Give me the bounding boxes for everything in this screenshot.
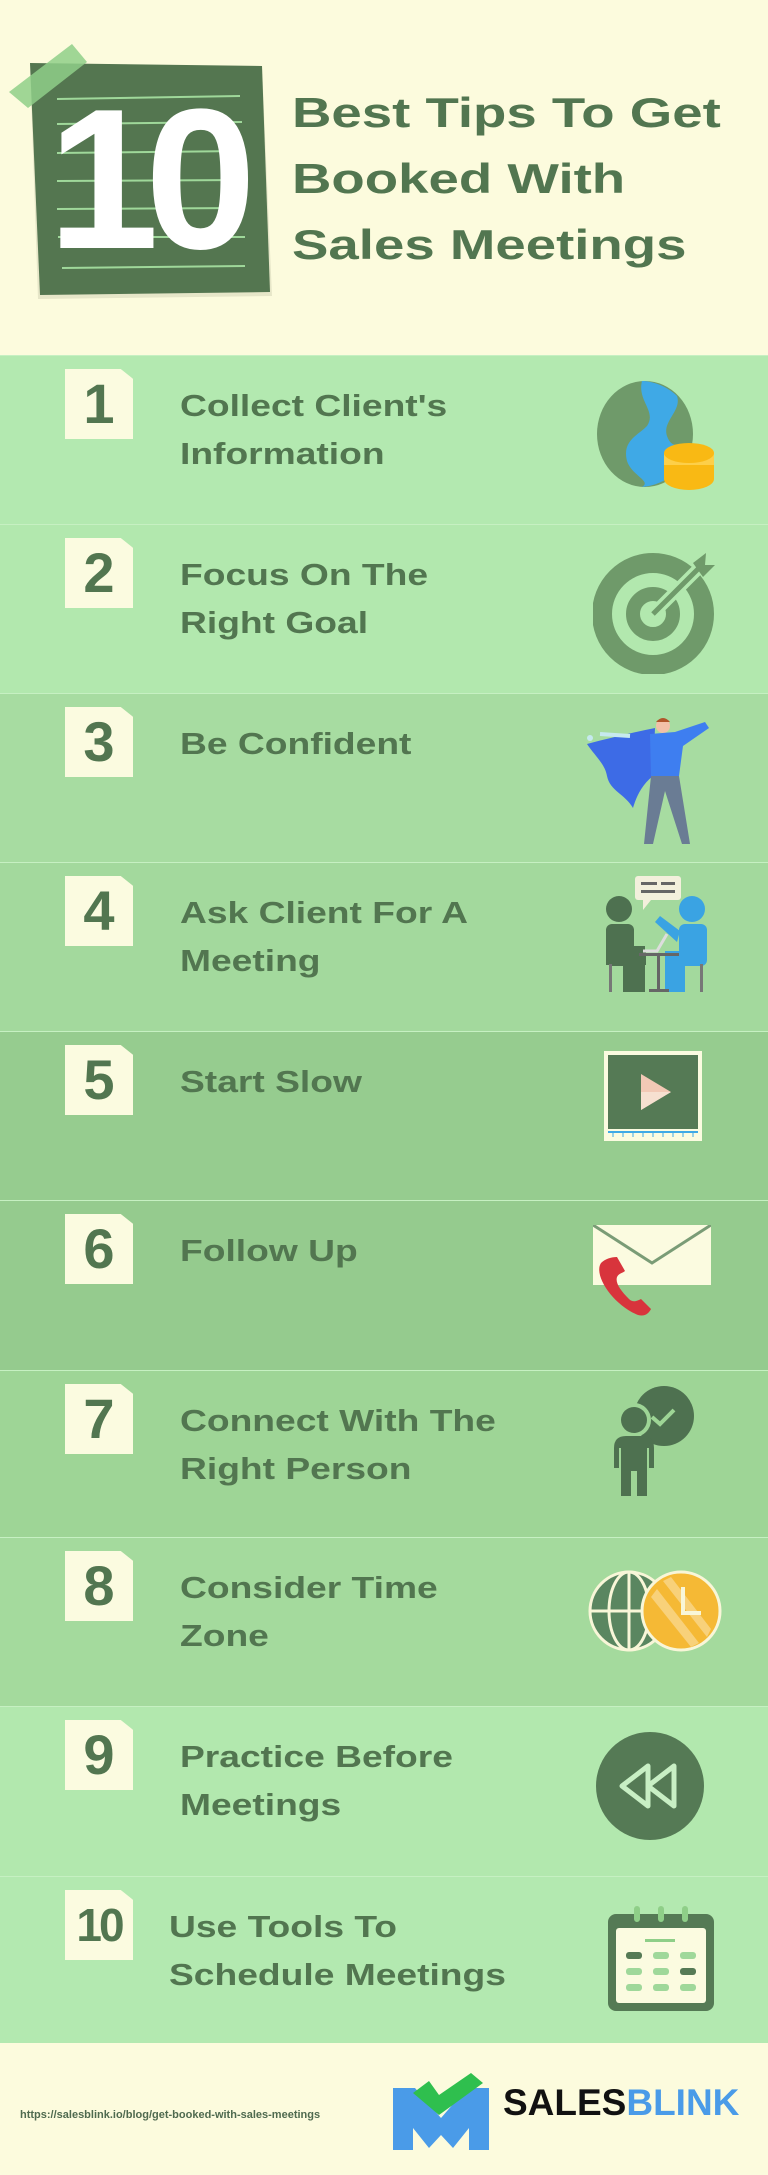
- text 8: [180, 1570, 438, 1653]
- number 6: [65, 1214, 133, 1284]
- icon: envelope phone: [593, 1225, 711, 1316]
- icon: calendar: [608, 1906, 714, 2011]
- number 6: 6: [83, 1217, 115, 1280]
- title: Booked With: [292, 155, 625, 202]
- number 7: [65, 1384, 133, 1454]
- text 1: Collect Client's: [180, 388, 447, 423]
- text 6: Follow Up: [180, 1233, 358, 1268]
- number 1: 1: [83, 372, 115, 435]
- url text: https://salesblink.io/blog/get-booked-with-sales-meetings: [20, 2109, 320, 2121]
- icon: person with check: [614, 1386, 694, 1496]
- text 10: Use Tools To: [169, 1909, 397, 1944]
- number 9: [65, 1720, 133, 1790]
- number 8: 8: [83, 1554, 115, 1617]
- number 8: [65, 1551, 133, 1621]
- text 8: Consider Time: [180, 1570, 438, 1605]
- text 5: Start Slow: [180, 1064, 362, 1099]
- text 4: Meeting: [180, 943, 321, 978]
- logo text: SALESBLINK: [503, 2082, 739, 2123]
- number 5: [65, 1045, 133, 1115]
- row 5: [0, 1031, 768, 1200]
- text 10: [169, 1909, 506, 1992]
- icon: superhero: [587, 718, 709, 844]
- number 1: [65, 369, 133, 439]
- row 3: [0, 693, 768, 862]
- logo icon: [393, 2073, 489, 2150]
- text 9: Meetings: [180, 1787, 341, 1822]
- number 3: 3: [83, 710, 115, 773]
- notepad with big 10: 10: [48, 68, 249, 291]
- row 8: [0, 1537, 768, 1706]
- number 10: [65, 1890, 133, 1960]
- text 7: [180, 1403, 496, 1486]
- text 1: [180, 388, 447, 471]
- text 2: Focus On The: [180, 557, 428, 592]
- number 2: [65, 538, 133, 608]
- header: [9, 44, 721, 299]
- icon: video play: [604, 1051, 702, 1141]
- icon: globe and clock: [588, 1570, 722, 1652]
- icon: globe with coins: [597, 381, 714, 490]
- number 5: 5: [83, 1048, 115, 1111]
- text 2: Right Goal: [180, 605, 368, 640]
- footer: [20, 2073, 739, 2150]
- icon: target: [593, 553, 715, 674]
- row 7: [0, 1370, 768, 1537]
- text 1: Information: [180, 436, 385, 471]
- row 9: [0, 1706, 768, 1876]
- number 9: 9: [83, 1723, 115, 1786]
- title: Best Tips To Get: [292, 89, 721, 136]
- row 2: [0, 524, 768, 693]
- text 4: [180, 895, 468, 978]
- icon: meeting: [606, 876, 707, 992]
- text 2: [180, 557, 428, 640]
- row 6: [0, 1200, 768, 1370]
- text 3: Be Confident: [180, 726, 411, 761]
- text 9: [180, 1739, 453, 1822]
- text 8: Zone: [180, 1618, 269, 1653]
- text 7: Right Person: [180, 1451, 411, 1486]
- number 10: 10: [76, 1899, 122, 1951]
- row 4: [0, 862, 768, 1031]
- text 4: Ask Client For A: [180, 895, 468, 930]
- number 2: 2: [83, 541, 115, 604]
- icon: rewind: [596, 1732, 704, 1840]
- row 10: [0, 1876, 768, 2043]
- row 1: [0, 355, 768, 524]
- number 4: [65, 876, 133, 946]
- notepad with big 10: [9, 44, 272, 299]
- text 10: Schedule Meetings: [169, 1957, 506, 1992]
- number 7: 7: [83, 1387, 115, 1450]
- title: [292, 89, 721, 268]
- number 3: [65, 707, 133, 777]
- text 9: Practice Before: [180, 1739, 453, 1774]
- number 4: 4: [83, 879, 115, 942]
- text 7: Connect With The: [180, 1403, 496, 1438]
- title: Sales Meetings: [292, 221, 687, 268]
